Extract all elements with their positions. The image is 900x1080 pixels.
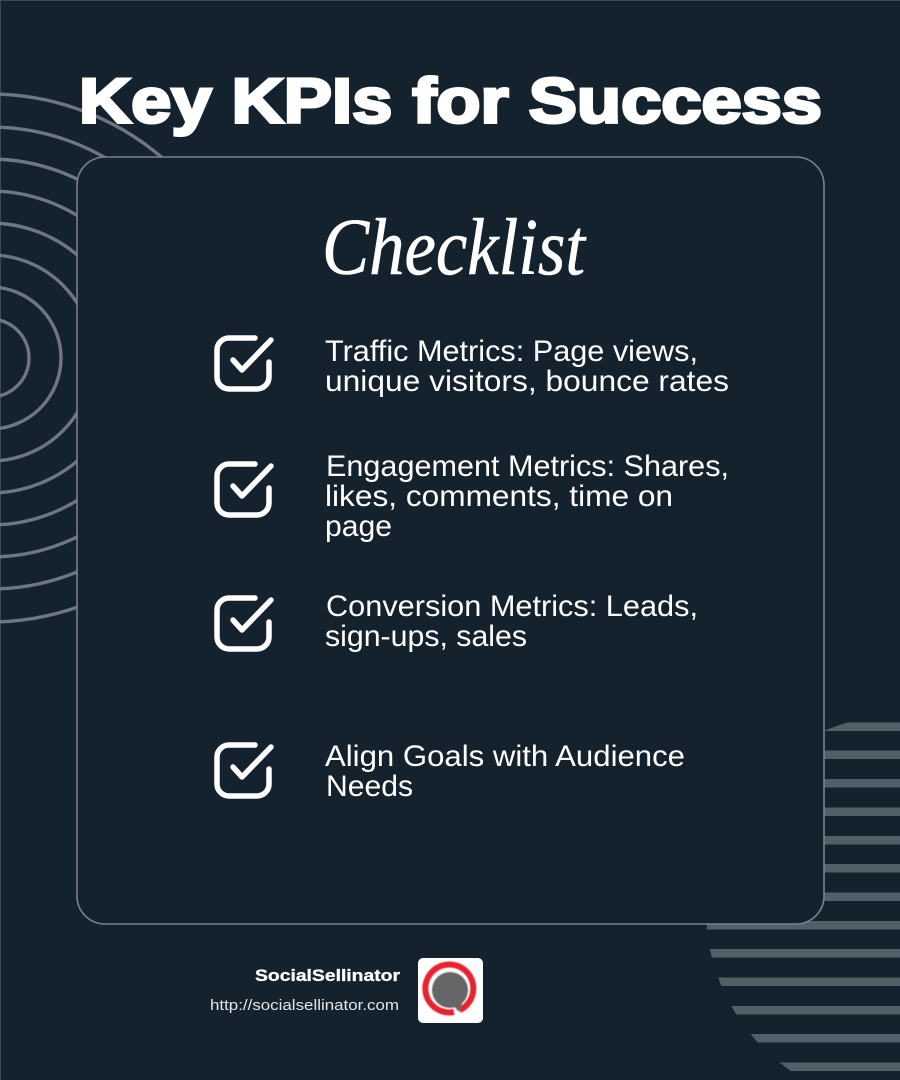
- background: striped circle: [690, 722, 900, 1071]
- icon: checkbox: [217, 338, 271, 389]
- text: traffic metrics: unique visitors, bounce rates: [325, 365, 729, 398]
- text: engagement metrics: likes, comments, time on: [325, 480, 673, 513]
- background: concentric arcs: [0, 94, 254, 622]
- text: conversion metrics: [325, 590, 698, 653]
- icon: checkbox: [217, 598, 271, 649]
- heading: Checklist: Checklist: [322, 204, 587, 292]
- checklist item: conversion metrics: [217, 590, 698, 653]
- text: traffic metrics: Traffic Metrics: Page views,: [325, 335, 698, 368]
- text: align goals: Needs: [326, 770, 413, 803]
- text: engagement metrics: page: [325, 510, 392, 543]
- checklist item: align goals: [217, 740, 685, 803]
- footer: brand name: SocialSellinator: [255, 966, 400, 985]
- text: engagement metrics: [325, 450, 729, 543]
- checklist item: engagement metrics: [217, 450, 729, 543]
- icon: checkbox: [217, 464, 271, 515]
- footer: url: http://socialsellinator.com: [210, 997, 399, 1014]
- icon: checkbox: [217, 745, 271, 796]
- text: align goals: [325, 740, 685, 803]
- text: engagement metrics: Engagement Metrics: Shares,: [326, 450, 729, 483]
- text: align goals: Align Goals with Audience: [325, 740, 685, 773]
- checklist item: traffic metrics: [217, 335, 729, 398]
- text: conversion metrics: sign-ups, sales: [325, 620, 527, 653]
- icon: logo: [418, 958, 483, 1023]
- text: conversion metrics: Conversion Metrics: Leads,: [326, 590, 698, 623]
- panel: checklist card: [77, 157, 824, 924]
- text: traffic metrics: [325, 335, 729, 398]
- title: Key KPIs for Success: [79, 66, 822, 136]
